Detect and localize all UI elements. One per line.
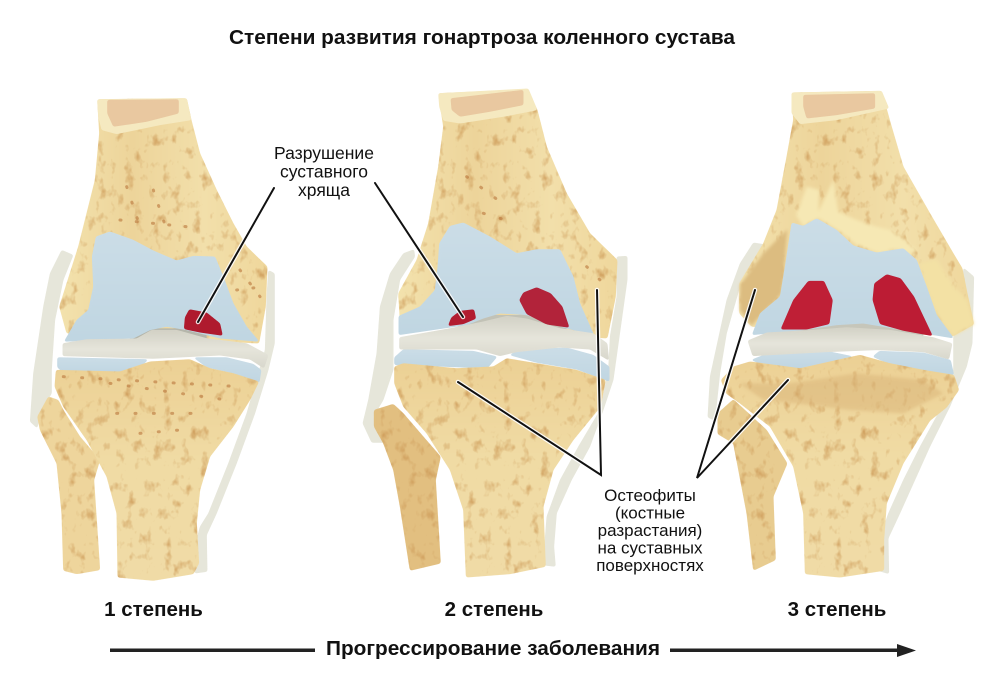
meniscus bbox=[63, 330, 268, 368]
femur spongy bone bbox=[451, 90, 523, 117]
tibial plateau shading bbox=[740, 373, 943, 413]
tibia bbox=[721, 355, 959, 577]
meniscus bbox=[399, 316, 609, 361]
fibula bbox=[374, 404, 441, 571]
joint gap shadow bbox=[777, 322, 923, 347]
cartilage damage lateral bbox=[519, 287, 569, 328]
grade 2 label: 2 степень bbox=[445, 598, 543, 621]
left osteophytes bbox=[740, 229, 787, 326]
knee illustration: grade 3 bbox=[708, 91, 974, 577]
label: cartilage destruction: хряща bbox=[298, 180, 350, 200]
label: osteophytes: на суставных bbox=[597, 538, 703, 558]
cartilage damage bbox=[184, 309, 223, 336]
tibia bbox=[55, 359, 259, 581]
left ligament bbox=[30, 250, 73, 428]
femur surface pits bbox=[467, 177, 603, 283]
label: osteophytes: (костные bbox=[615, 504, 685, 522]
femur cut ring bbox=[792, 91, 889, 124]
progression arrow bbox=[110, 644, 916, 657]
femur spongy bone bbox=[107, 99, 179, 127]
joint gap shadow bbox=[130, 328, 207, 347]
femoral cartilage bbox=[399, 223, 594, 335]
callout lines: cartilage destruction bbox=[198, 183, 463, 322]
tibial cartilage bbox=[394, 348, 609, 382]
meniscus bbox=[748, 327, 952, 359]
label: osteophytes: поверхностях bbox=[596, 556, 704, 575]
label: cartilage destruction: суставного bbox=[280, 162, 368, 182]
right osteophytes bbox=[919, 259, 974, 336]
label: osteophytes: Остеофиты bbox=[604, 486, 696, 505]
femur cut ring bbox=[438, 89, 537, 123]
progression label: Прогрессирование заболевания bbox=[326, 638, 660, 660]
fibula bbox=[37, 397, 100, 574]
femoral cartilage bbox=[64, 232, 259, 342]
tibia bbox=[394, 358, 606, 577]
fibula bbox=[718, 399, 787, 571]
grade 1 label: 1 степень bbox=[104, 598, 203, 621]
femur cut ring bbox=[97, 98, 191, 134]
cartilage damage medial bbox=[781, 281, 833, 329]
title: Степени развития гонартроза коленного сустава bbox=[229, 27, 736, 49]
joint gap shadow bbox=[460, 315, 567, 347]
right ligament bbox=[878, 268, 974, 574]
tibia surface pits bbox=[63, 377, 240, 433]
label: osteophytes: разрастания) bbox=[598, 521, 702, 540]
femur bbox=[398, 89, 617, 338]
tibial cartilage bbox=[751, 351, 954, 375]
femur bbox=[59, 98, 267, 343]
femur surface pits bbox=[120, 187, 263, 297]
callout lines: osteophytes bbox=[458, 290, 788, 478]
upper osteophytes bbox=[796, 180, 917, 255]
femur spongy bone bbox=[803, 93, 875, 118]
knee illustration: grade 1 bbox=[30, 98, 275, 581]
right ligament bbox=[544, 256, 627, 567]
femoral cartilage bbox=[752, 218, 954, 338]
left ligament bbox=[363, 249, 415, 443]
grade 3 label: 3 степень bbox=[788, 598, 886, 621]
right ligament bbox=[195, 270, 275, 573]
label: cartilage destruction: Разрушение bbox=[274, 143, 374, 163]
cartilage damage lateral bbox=[873, 274, 933, 336]
tibial cartilage bbox=[57, 357, 261, 383]
left ligament bbox=[708, 243, 764, 421]
cartilage damage medial bbox=[448, 309, 476, 326]
femur bbox=[739, 91, 974, 336]
knee illustration: grade 2 bbox=[363, 89, 627, 577]
